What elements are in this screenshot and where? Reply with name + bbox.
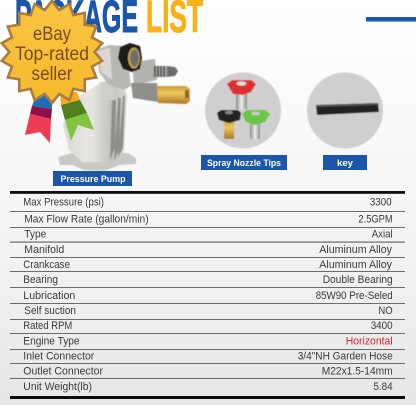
table: specifications: 3/4"NH Garden Hose bbox=[298, 351, 393, 363]
table: specifications: M22x1.5-14mm bbox=[322, 366, 393, 378]
label: pressure pump bbox=[53, 171, 132, 186]
badge: eBay top-rated seller: seller bbox=[32, 63, 73, 85]
table: specifications: Inlet Connector bbox=[23, 351, 95, 363]
badge: eBay top-rated seller: eBay bbox=[33, 23, 71, 45]
table: specifications: Outlet Connector bbox=[23, 366, 103, 378]
table: specifications: Manifold bbox=[24, 244, 64, 256]
icon: pressure pump bbox=[58, 43, 190, 171]
label: spray nozzle tips bbox=[201, 155, 287, 170]
badge: eBay top-rated seller: Top-rated bbox=[15, 43, 89, 65]
table: specifications: 5.84 bbox=[373, 381, 393, 393]
label: key bbox=[323, 155, 367, 170]
icon: spray nozzle tips bbox=[205, 72, 281, 148]
badge: eBay top-rated seller bbox=[2, 1, 102, 103]
top right accent bar bbox=[366, 17, 416, 22]
icon: key bbox=[307, 72, 383, 148]
label: key: key bbox=[337, 158, 354, 169]
table: specifications: Max Flow Rate (gallon/min) bbox=[24, 214, 149, 226]
table: specifications: 3300 bbox=[370, 196, 392, 208]
table: specifications: Bearing bbox=[23, 274, 58, 286]
table: specifications: Axial bbox=[372, 228, 393, 240]
table: specifications: Unit Weight(lb) bbox=[23, 381, 92, 393]
table: specifications: Double Bearing bbox=[323, 274, 393, 286]
table: specifications: 3400 bbox=[371, 320, 393, 332]
table: specifications: Max Pressure (psi) bbox=[23, 196, 104, 208]
table: specifications: Rated RPM bbox=[23, 320, 72, 332]
table: specifications: Aluminum Alloy bbox=[319, 259, 392, 271]
table: specifications: NO bbox=[378, 305, 393, 317]
table: specifications: 2.5GPM bbox=[358, 214, 393, 226]
table: specifications: 85W90 Pre-Seled bbox=[316, 290, 393, 302]
label: spray nozzle tips: Spray Nozzle Tips bbox=[207, 158, 281, 169]
table: specifications: Crankcase bbox=[23, 259, 70, 271]
table: specifications: Aluminum Alloy bbox=[319, 244, 392, 256]
table: specifications: Horizontal bbox=[346, 335, 393, 347]
table: specifications: Lubrication bbox=[23, 290, 75, 302]
label: pressure pump: Pressure Pump bbox=[60, 174, 126, 185]
table: specifications bbox=[10, 191, 405, 399]
table: specifications: Self suction bbox=[24, 305, 76, 317]
icon: ribbons bbox=[25, 90, 94, 143]
table: specifications: Engine Type bbox=[23, 335, 80, 347]
table: specifications: Type bbox=[24, 228, 46, 240]
